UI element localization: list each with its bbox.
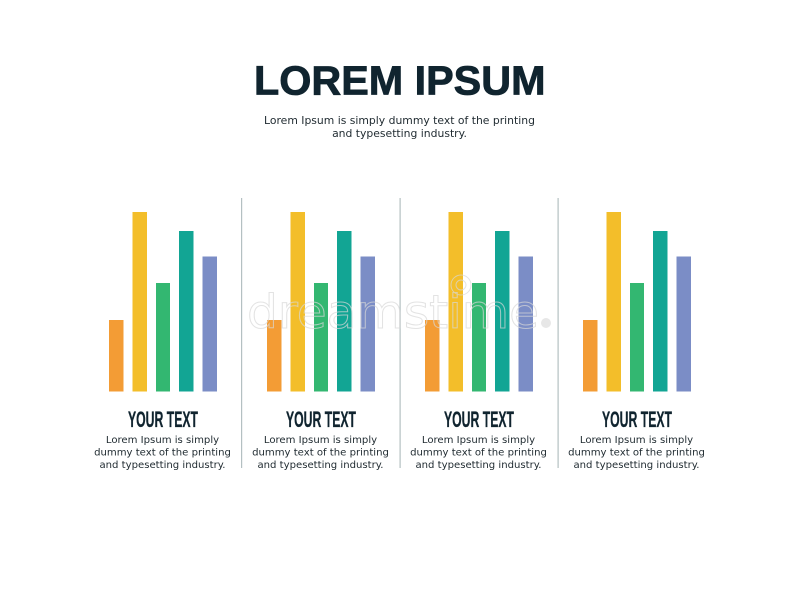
text block 1: dummy text of the printing — [94, 448, 231, 458]
text block 3: and typesetting industry. — [415, 460, 542, 471]
text block 4 — [568, 435, 705, 471]
bar chart 4 — [583, 212, 691, 392]
text block 2 — [252, 435, 389, 471]
text block 2: Lorem Ipsum is simply — [264, 435, 377, 446]
text block 1: and typesetting industry. — [99, 460, 226, 471]
heading 2: YOUR TEXT — [286, 407, 356, 432]
text block 4: Lorem Ipsum is simply — [580, 435, 693, 446]
text block 4: dummy text of the printing — [568, 448, 705, 458]
watermark: dreamstime — [247, 285, 539, 339]
bar chart 2 — [267, 212, 375, 392]
text block 1 — [94, 435, 231, 471]
text block 3: Lorem Ipsum is simply — [422, 435, 535, 446]
text block 3 — [410, 435, 547, 471]
subtitle — [264, 114, 535, 140]
heading 1: YOUR TEXT — [128, 407, 198, 432]
bar chart 1 — [109, 212, 217, 392]
heading 3: YOUR TEXT — [444, 407, 514, 432]
text block 3: dummy text of the printing — [410, 448, 547, 458]
subtitle: Lorem Ipsum is simply dummy text of the printing — [264, 114, 535, 127]
text block 1: Lorem Ipsum is simply — [106, 435, 219, 446]
subtitle: and typesetting industry. — [332, 127, 467, 140]
bar chart 3 — [425, 212, 533, 392]
panel: column 4 — [568, 212, 705, 471]
panel: column 2 — [252, 212, 389, 471]
heading 4: YOUR TEXT — [602, 407, 672, 432]
panel: column 1 — [94, 212, 231, 471]
text block 4: and typesetting industry. — [573, 460, 700, 471]
title: LOREM IPSUM — [254, 58, 546, 104]
text block 2: and typesetting industry. — [257, 460, 384, 471]
text block 2: dummy text of the printing — [252, 448, 389, 458]
panel: column 3 — [410, 212, 547, 471]
